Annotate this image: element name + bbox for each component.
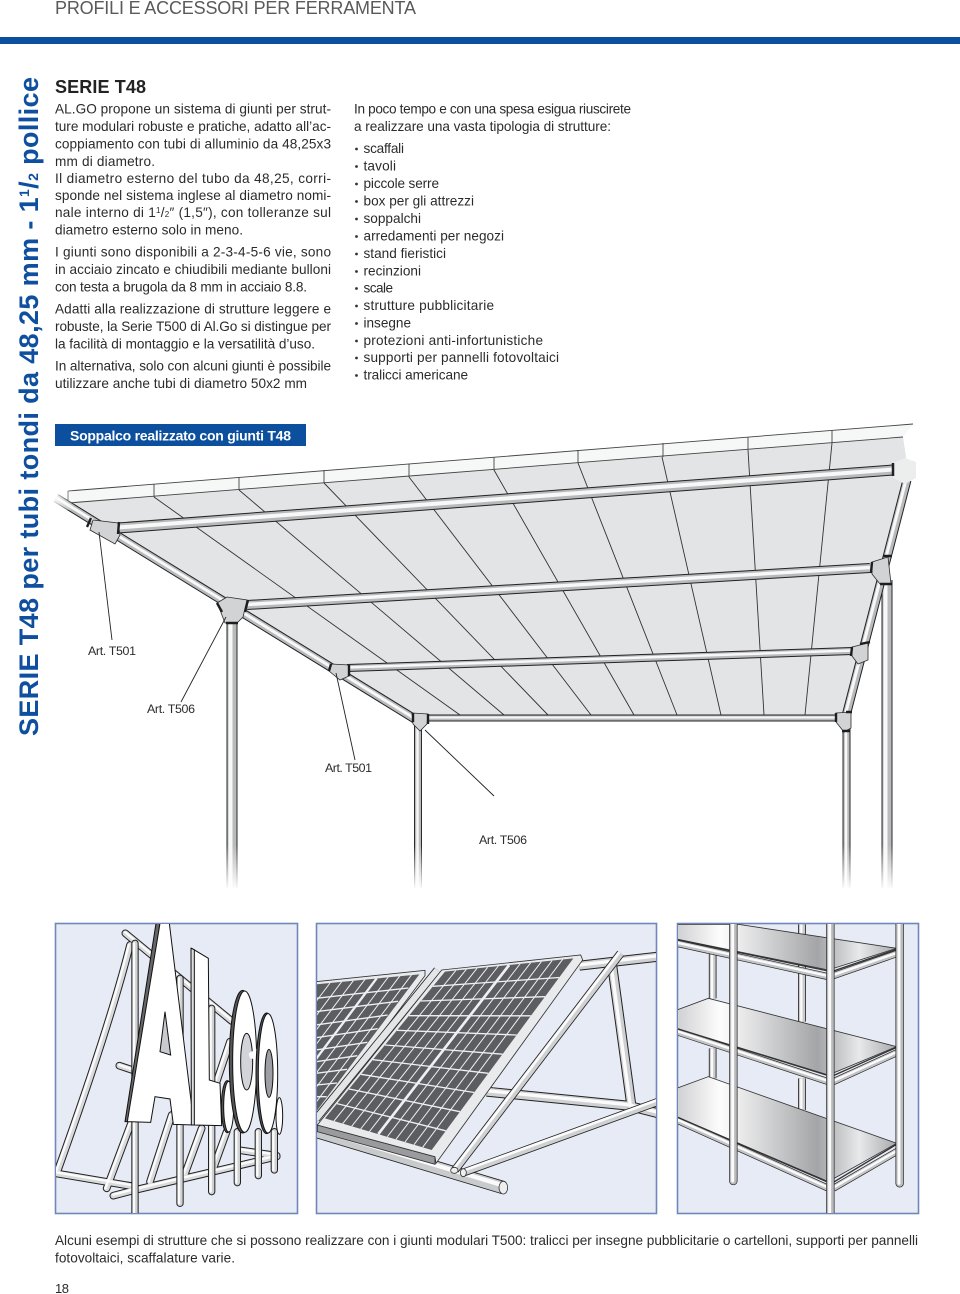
left text column: coppiamento con tubi di alluminio da 48,25x3 xyxy=(55,136,331,152)
vertical columns xyxy=(230,580,887,888)
article labels: Art. T501 xyxy=(325,761,372,775)
bullet list of applications: tavoli xyxy=(364,158,396,174)
rear posts xyxy=(712,924,802,1110)
left text column: Il diametro esterno del tubo da 48,25, corri- xyxy=(55,171,331,186)
article labels: Art. T506 xyxy=(147,702,195,716)
left solar module xyxy=(316,970,425,1128)
left text column: ture modulari robuste e pratiche, adatto all’ac- xyxy=(55,119,331,134)
left text column: In alternativa, solo con alcuni giunti è possibile xyxy=(55,358,331,374)
main illustration: mezzanine frame xyxy=(50,424,916,890)
bullet list of applications: scale xyxy=(364,280,393,296)
left text column: nale interno di 1 xyxy=(55,205,156,220)
header blue bar xyxy=(0,37,960,44)
bottom caption: fotovoltaici, scaffalature varie. xyxy=(55,1250,235,1266)
left text column: con testa a brugola da 8 mm in acciaio 8.8. xyxy=(55,280,307,294)
blue label: soppalco: Soppalco realizzato con giunti T48 xyxy=(70,428,291,444)
left text column: 1 xyxy=(156,206,161,215)
left text column: diametro esterno solo in meno. xyxy=(55,222,243,238)
vertical side title: SERIE T48 per tubi tondi da 48,25 mm - 1 xyxy=(14,197,44,736)
horizontal tubes xyxy=(118,470,893,718)
right solar module xyxy=(317,955,583,1164)
right text intro: In poco tempo e con una spesa esigua riuscirete xyxy=(354,102,631,116)
vertical side title: 1 xyxy=(16,189,32,197)
leader lines xyxy=(99,532,494,796)
right text intro xyxy=(354,102,631,134)
bullet list of applications: strutture pubblicitarie xyxy=(364,298,494,313)
left text column: 2″ (1,5″), con tolleranze sul xyxy=(165,205,331,220)
bullet list of applications: protezioni anti-infortunistiche xyxy=(364,333,543,348)
left text column: I giunti sono disponibili a 2-3-4-5-6 vie, sono xyxy=(55,244,331,260)
shelves xyxy=(677,924,897,1182)
bullet list of applications xyxy=(355,141,559,382)
sign letters ALGO xyxy=(125,923,283,1134)
sign tubes xyxy=(56,932,277,1213)
panel: sign structure xyxy=(56,923,298,1214)
diagonal edge tubes xyxy=(56,480,907,721)
bullet list of applications: insegne xyxy=(364,316,411,330)
left text column: in acciaio zincato e chiudibili mediante bulloni xyxy=(55,262,331,277)
left text column: utilizzare anche tubi di diametro 50x2 mm xyxy=(55,376,307,391)
bottom caption xyxy=(55,1233,918,1266)
overlays fading ends xyxy=(220,845,900,890)
rail between modules xyxy=(316,970,437,1119)
bullet list of applications: recinzioni xyxy=(364,264,421,278)
article labels: Art. T501 xyxy=(88,644,136,658)
bullet list of applications: stand fieristici xyxy=(364,246,446,261)
ceiling panel surface xyxy=(68,424,913,720)
bullet list of applications: arredamenti per negozi xyxy=(364,228,504,244)
article labels xyxy=(88,644,527,847)
article labels: Art. T506 xyxy=(479,833,527,847)
panel: shelving xyxy=(677,922,918,1218)
joints xyxy=(87,458,916,732)
bullet list of applications: scaffali xyxy=(364,141,404,156)
bullet list of applications: soppalchi xyxy=(364,211,421,226)
left text column: mm di diametro. xyxy=(55,154,155,169)
shelf rails xyxy=(677,940,898,1188)
left text column: / xyxy=(161,205,165,220)
rear tubes xyxy=(317,956,658,1188)
bullet list of applications: tralicci americane xyxy=(364,368,468,382)
bullet list of applications: piccole serre xyxy=(364,176,439,191)
panel: solar panel support xyxy=(316,924,658,1214)
left text column xyxy=(55,102,331,391)
left text column: sponde nel sistema inglese al diametro nomi- xyxy=(55,188,331,203)
front posts xyxy=(733,922,900,1218)
section heading: SERIE T48 xyxy=(55,77,146,97)
bullet list of applications: box per gli attrezzi xyxy=(364,194,474,208)
right text intro: a realizzare una vasta tipologia di strutture: xyxy=(354,119,611,134)
blue label: soppalco xyxy=(55,424,306,446)
left text column: robuste, la Serie T500 di Al.Go si distingue per xyxy=(55,319,331,334)
bottom caption: Alcuni esempi di strutture che si possono realizzare con i giunti modulari T500: tralicci per insegne pubblicitarie o cartelloni, supporti per pannelli xyxy=(55,1233,918,1248)
vertical side title: / xyxy=(14,181,44,189)
vertical side title: 2 pollice xyxy=(14,77,44,181)
left text column: AL.GO propone un sistema di giunti per strut- xyxy=(55,102,331,116)
front braces xyxy=(454,952,658,1172)
left text column: la facilità di montaggio e la versatilità d’uso. xyxy=(55,336,315,352)
bullet list of applications: supporti per pannelli fotovoltaici xyxy=(364,350,559,365)
left text column: Adatti alla realizzazione di strutture leggere e xyxy=(55,302,331,316)
